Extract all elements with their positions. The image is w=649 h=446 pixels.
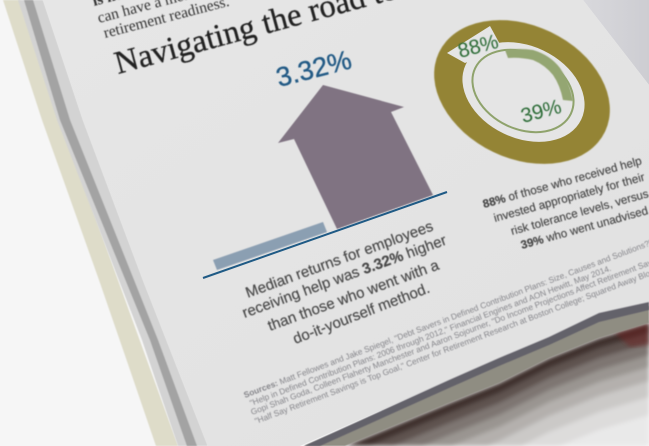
label 88%: 88% <box>455 30 501 63</box>
outer ring 88% <box>410 0 634 192</box>
red tint from the next page <box>615 323 649 347</box>
ring gap <box>447 26 502 63</box>
inner thin ring <box>459 34 587 148</box>
book shadow <box>345 323 649 446</box>
advised text: 39% who went unadvised. <box>519 203 649 252</box>
median returns text: Median returns for employees <box>243 218 436 302</box>
bottom page dark edge <box>304 302 649 446</box>
inner ring 39% <box>505 49 573 101</box>
median returns text: than those who went with a <box>266 257 442 335</box>
baseline <box>203 192 447 278</box>
value label: 3.32% <box>273 45 355 93</box>
page stack: cream edge <box>3 0 178 446</box>
arrow bar <box>278 85 433 229</box>
median returns text: do-it-yourself method. <box>291 280 432 348</box>
page stack: light edge <box>18 0 208 446</box>
bar chart: arrow comparison <box>203 45 447 278</box>
sources: "Half Say Retirement Savings is Top Goal," Center for Retirement Research at Boston College; Squared Away Blog <box>253 266 649 426</box>
page stack: grey edge <box>24 0 197 446</box>
label 39%: 39% <box>518 95 564 128</box>
bottom page stack <box>304 306 649 446</box>
advised text: 88% of those who received help <box>481 154 643 211</box>
advised text: invested appropriately for their <box>492 171 646 225</box>
median returns text <box>240 218 449 348</box>
donut chart <box>410 0 634 192</box>
median returns text: receiving help was 3.32% higher <box>240 232 449 322</box>
advised text: risk tolerance levels, versus <box>509 187 649 238</box>
sources: "Help in Defined Contribution Plans: 2006 through 2012," Financial Engines and AON Hewitt, May 2014. <box>248 263 612 408</box>
gutter shadow <box>583 0 649 85</box>
ring interior <box>446 23 601 161</box>
advised text <box>481 154 649 252</box>
small bar <box>213 222 327 270</box>
